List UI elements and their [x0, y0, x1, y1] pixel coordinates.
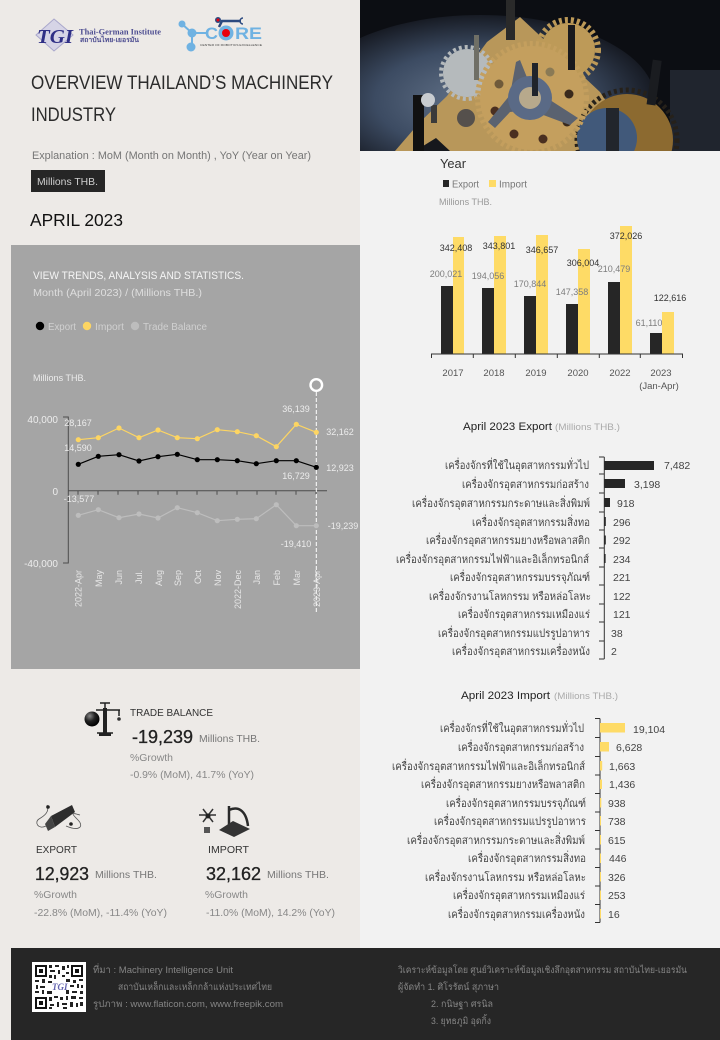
- icon: balance scale: [84, 703, 121, 736]
- category labels: เครื่องจักรอุตสาหกรรมไฟฟ้าและอิเล็กทรอนิกส์: [392, 758, 585, 773]
- year labels: [442, 368, 679, 392]
- category labels: เครื่องจักรอุตสาหกรรมไฟฟ้าและอิเล็กทรอนิกส์: [396, 551, 589, 566]
- heading: [461, 690, 618, 702]
- import value labels: 306,004: [567, 258, 599, 268]
- credits text: วิเคราะห์ข้อมูลโดย ศูนย์วิเคราะห์ข้อมูลเชิงลึกอุตสาหกรรม สถาบันไทย-เยอรมัน: [397, 964, 687, 976]
- category labels: [392, 720, 586, 921]
- data labels: -13,577: [64, 494, 94, 504]
- line chart: -40,000: [24, 559, 58, 570]
- export value labels: 170,844: [514, 279, 546, 289]
- data labels: 36,139: [282, 404, 310, 414]
- chart legend: [443, 180, 527, 190]
- month axis labels: 2023-Apr: [312, 570, 322, 607]
- values: 122: [613, 591, 631, 603]
- logo: Thai-German Institute: Thai-German Institute: [79, 28, 161, 36]
- export value labels: 210,479: [598, 264, 630, 274]
- chart legend: Trade Balance: [143, 322, 207, 333]
- line chart: 0: [52, 487, 58, 498]
- values: 615: [608, 835, 626, 847]
- values: 446: [609, 853, 627, 865]
- bars: import: [453, 226, 674, 354]
- stat: import: -11.0% (MoM), 14.2% (YoY): [206, 908, 335, 919]
- import value labels: 372,026: [610, 231, 642, 241]
- credits text: ผู้จัดทำ 1. ศิโรรัตน์ สุภาษา: [398, 981, 499, 993]
- panel heading: [33, 270, 244, 299]
- icon: truck: [37, 805, 81, 831]
- stat: trade balance: -19,239: [132, 727, 193, 747]
- values: 938: [608, 798, 626, 810]
- logo: CORE: [178, 17, 262, 52]
- category labels: เครื่องจักรอุตสาหกรรมเหมืองแร่: [453, 887, 585, 902]
- chart heading: Year: [440, 156, 467, 171]
- icon: QR code: [32, 962, 86, 1012]
- category labels: เครื่องจักรอุตสาหกรรมแปรรูปอาหาร: [438, 625, 590, 640]
- logo: CORE: C: [205, 24, 218, 43]
- heading: (Millions THB.): [554, 691, 618, 702]
- month axis labels: [74, 570, 322, 609]
- series: trade balance: [76, 502, 319, 528]
- logo: Thai-German Institute: [36, 19, 161, 51]
- values: 221: [613, 572, 631, 584]
- data labels: [64, 404, 358, 549]
- heading: (Millions THB.): [555, 422, 620, 433]
- export value labels: 194,056: [472, 271, 504, 281]
- export value labels: 200,021: [430, 269, 462, 279]
- chart legend: Export: [452, 180, 479, 190]
- month axis labels: 2022-Apr: [74, 570, 84, 607]
- category labels: เครื่องจักรอุตสาหกรรมบรรจุภัณฑ์: [446, 795, 586, 810]
- credits text: [397, 964, 687, 1027]
- icon: drone and forklift: [199, 806, 250, 837]
- chart legend: Export: [48, 322, 76, 333]
- bars: [600, 723, 625, 918]
- category labels: เครื่องจักรที่ใช้ในอุตสาหกรรมทั่วไป: [445, 457, 589, 472]
- category labels: เครื่องจักรอุตสาหกรรมแปรรูปอาหาร: [434, 813, 586, 828]
- title: INDUSTRY: [31, 105, 116, 126]
- stat: trade balance: Millions THB.: [199, 733, 260, 745]
- stat: import: 32,162: [206, 864, 261, 884]
- series: import: [76, 422, 319, 449]
- values: 6,628: [616, 742, 642, 754]
- category labels: เครื่องจักรอุตสาหกรรมยางหรือพลาสติก: [421, 776, 585, 791]
- values: 1,436: [609, 779, 635, 791]
- panel: yearly bar chart: [430, 156, 686, 392]
- stat: export: [34, 805, 167, 919]
- category labels: เครื่องจักรอุตสาหกรรมสิ่งทอ: [468, 850, 586, 865]
- values: 918: [617, 498, 635, 510]
- values: [611, 460, 690, 658]
- credits text: 3. ยุทธภูมิ อุดกิ้ง: [431, 1014, 491, 1027]
- category labels: เครื่องจักรอุตสาหกรรมเครื่องหนัง: [452, 643, 590, 658]
- title: OVERVIEW THAILAND’S MACHINERY: [31, 73, 333, 94]
- stat: import: %Growth: [205, 890, 248, 901]
- month axis labels: May: [94, 570, 104, 587]
- category labels: เครื่องจักรอุตสาหกรรมกระดาษและสิ่งพิมพ์: [412, 495, 590, 510]
- values: 2: [611, 646, 617, 658]
- source text: [93, 963, 283, 1010]
- source text: สถาบันเหล็กและเหล็กกล้าแห่งประเทศไทย: [118, 980, 272, 993]
- heading: April 2023 Import: [461, 690, 550, 702]
- data labels: 14,590: [64, 443, 92, 453]
- import value labels: [440, 231, 686, 303]
- import value labels: 342,408: [440, 243, 472, 253]
- values: 19,104: [633, 724, 665, 736]
- source text: ที่มา : Machinery Intelligence Unit: [93, 963, 233, 976]
- values: 326: [608, 872, 626, 884]
- logo: Thai-German Institute: สถาบันไทย-เยอรมัน: [80, 35, 139, 44]
- values: 292: [613, 535, 631, 547]
- category labels: เครื่องจักรอุตสาหกรรมบรรจุภัณฑ์: [450, 569, 590, 584]
- stat: export: %Growth: [34, 890, 77, 901]
- month axis labels: Aug: [154, 570, 164, 586]
- category labels: เครื่องจักรอุตสาหกรรมเหมืองแร่: [458, 606, 590, 621]
- month axis labels: Jul.: [134, 570, 144, 584]
- panel: export by machinery: [396, 421, 690, 659]
- chart legend: Import: [95, 322, 124, 333]
- heading: April 2023 Export: [463, 421, 552, 433]
- source text: รูปภาพ : www.flaticon.com, www.freepik.com: [93, 999, 283, 1010]
- import value labels: 122,616: [654, 293, 686, 303]
- values: 234: [613, 554, 631, 566]
- import value labels: 343,801: [483, 241, 515, 251]
- month axis labels: Oct: [193, 570, 203, 584]
- bars: [604, 461, 654, 563]
- category labels: [396, 457, 591, 658]
- month axis labels: Sep: [173, 570, 183, 586]
- stat: trade balance: [84, 703, 260, 781]
- chart legend: Import: [499, 180, 527, 190]
- stat: trade balance: -0.9% (MoM), 41.7% (YoY): [130, 770, 254, 781]
- year labels: 2017: [442, 368, 464, 379]
- panel heading: Month (April 2023) / (Millions THB.): [33, 287, 202, 299]
- bars: export: [441, 282, 662, 354]
- stat: trade balance: %Growth: [130, 753, 173, 764]
- explanation text: Explanation : MoM (Month on Month) , YoY (Year on Year): [32, 150, 311, 162]
- panel: monthly trends: [11, 245, 360, 669]
- logo: Thai-German Institute: TGI: [37, 26, 74, 48]
- heading: [463, 421, 620, 433]
- series: export: [76, 452, 319, 470]
- category labels: เครื่องจักรอุตสาหกรรมก่อสร้าง: [458, 739, 584, 754]
- category labels: เครื่องจักรงานโลหกรรม หรือหล่อโลหะ: [425, 869, 586, 884]
- photo: brass clockwork gears: [360, 0, 720, 151]
- values: [608, 724, 665, 921]
- date heading: APRIL 2023: [30, 210, 123, 230]
- import value labels: 346,657: [526, 245, 558, 255]
- icon: QR code: TGI: [52, 982, 68, 992]
- month axis labels: Mar: [292, 570, 302, 586]
- category labels: เครื่องจักรอุตสาหกรรมเครื่องหนัง: [448, 906, 585, 921]
- credits text: 2. กนิษฐา ศรนิล: [431, 999, 493, 1010]
- year labels: 2023: [650, 368, 672, 379]
- title: [31, 73, 333, 126]
- vertical marker: [310, 379, 322, 612]
- values: 38: [611, 628, 623, 640]
- logo: CORE: CENTER OF ROBOTICS EXCELLENCE: [200, 43, 262, 47]
- category labels: เครื่องจักรอุตสาหกรรมก่อสร้าง: [462, 476, 589, 491]
- data labels: -19,410: [281, 539, 311, 549]
- data labels: 12,923: [326, 463, 354, 473]
- unit badge: [31, 170, 105, 192]
- export value labels: 147,358: [556, 287, 588, 297]
- axis: [599, 457, 604, 659]
- chart legend: [36, 322, 207, 333]
- month axis labels: Jan: [252, 570, 262, 585]
- category labels: เครื่องจักรอุตสาหกรรมสิ่งทอ: [472, 514, 590, 529]
- values: 16: [608, 909, 620, 921]
- values: 296: [613, 517, 631, 529]
- stat: export: EXPORT: [36, 844, 78, 856]
- year labels: (Jan-Apr): [639, 381, 679, 392]
- stat: import: Millions THB.: [267, 869, 329, 881]
- data labels: 32,162: [326, 427, 354, 437]
- year labels: 2022: [609, 368, 631, 379]
- stat: trade balance: TRADE BALANCE: [130, 707, 213, 719]
- values: 253: [608, 890, 626, 902]
- line chart: 40,000: [27, 415, 58, 426]
- unit badge: Millions THB.: [37, 176, 98, 188]
- month axis labels: Feb: [272, 570, 282, 586]
- data labels: 28,167: [64, 418, 92, 428]
- values: 7,482: [664, 460, 690, 472]
- logo: CORE: RE: [235, 24, 262, 43]
- category labels: เครื่องจักรงานโลหกรรม หรือหล่อโลหะ: [429, 588, 591, 603]
- year labels: 2018: [483, 368, 505, 379]
- export value labels: [430, 264, 662, 328]
- stat: import: [199, 806, 335, 919]
- year labels: 2020: [567, 368, 589, 379]
- axis: [595, 718, 600, 922]
- panel: import by machinery: [392, 690, 665, 922]
- year labels: 2019: [525, 368, 547, 379]
- unit note: Millions THB.: [439, 197, 492, 208]
- month axis labels: 2022-Dec: [233, 570, 243, 609]
- stat: import: IMPORT: [208, 844, 250, 856]
- values: 1,663: [609, 761, 635, 773]
- values: 738: [608, 816, 626, 828]
- data labels: -19,239: [328, 521, 358, 531]
- month axis labels: Nov: [213, 570, 223, 586]
- export value labels: 61,110: [636, 318, 662, 328]
- data labels: 16,729: [282, 471, 310, 481]
- stat: export: Millions THB.: [95, 869, 157, 881]
- category labels: เครื่องจักรอุตสาหกรรมยางหรือพลาสติก: [426, 532, 590, 547]
- category labels: เครื่องจักรที่ใช้ในอุตสาหกรรมทั่วไป: [440, 720, 584, 735]
- stat: export: 12,923: [35, 864, 89, 884]
- line chart: [24, 373, 358, 612]
- line chart: Millions THB.: [33, 373, 86, 384]
- footer: [11, 948, 720, 1040]
- stat: export: -22.8% (MoM), -11.4% (YoY): [34, 908, 167, 919]
- month axis labels: Jun: [114, 570, 124, 585]
- values: 121: [613, 609, 631, 621]
- values: 3,198: [634, 479, 660, 491]
- category labels: เครื่องจักรอุตสาหกรรมกระดาษและสิ่งพิมพ์: [407, 832, 585, 847]
- panel heading: VIEW TRENDS, ANALYSIS AND STATISTICS.: [33, 270, 244, 282]
